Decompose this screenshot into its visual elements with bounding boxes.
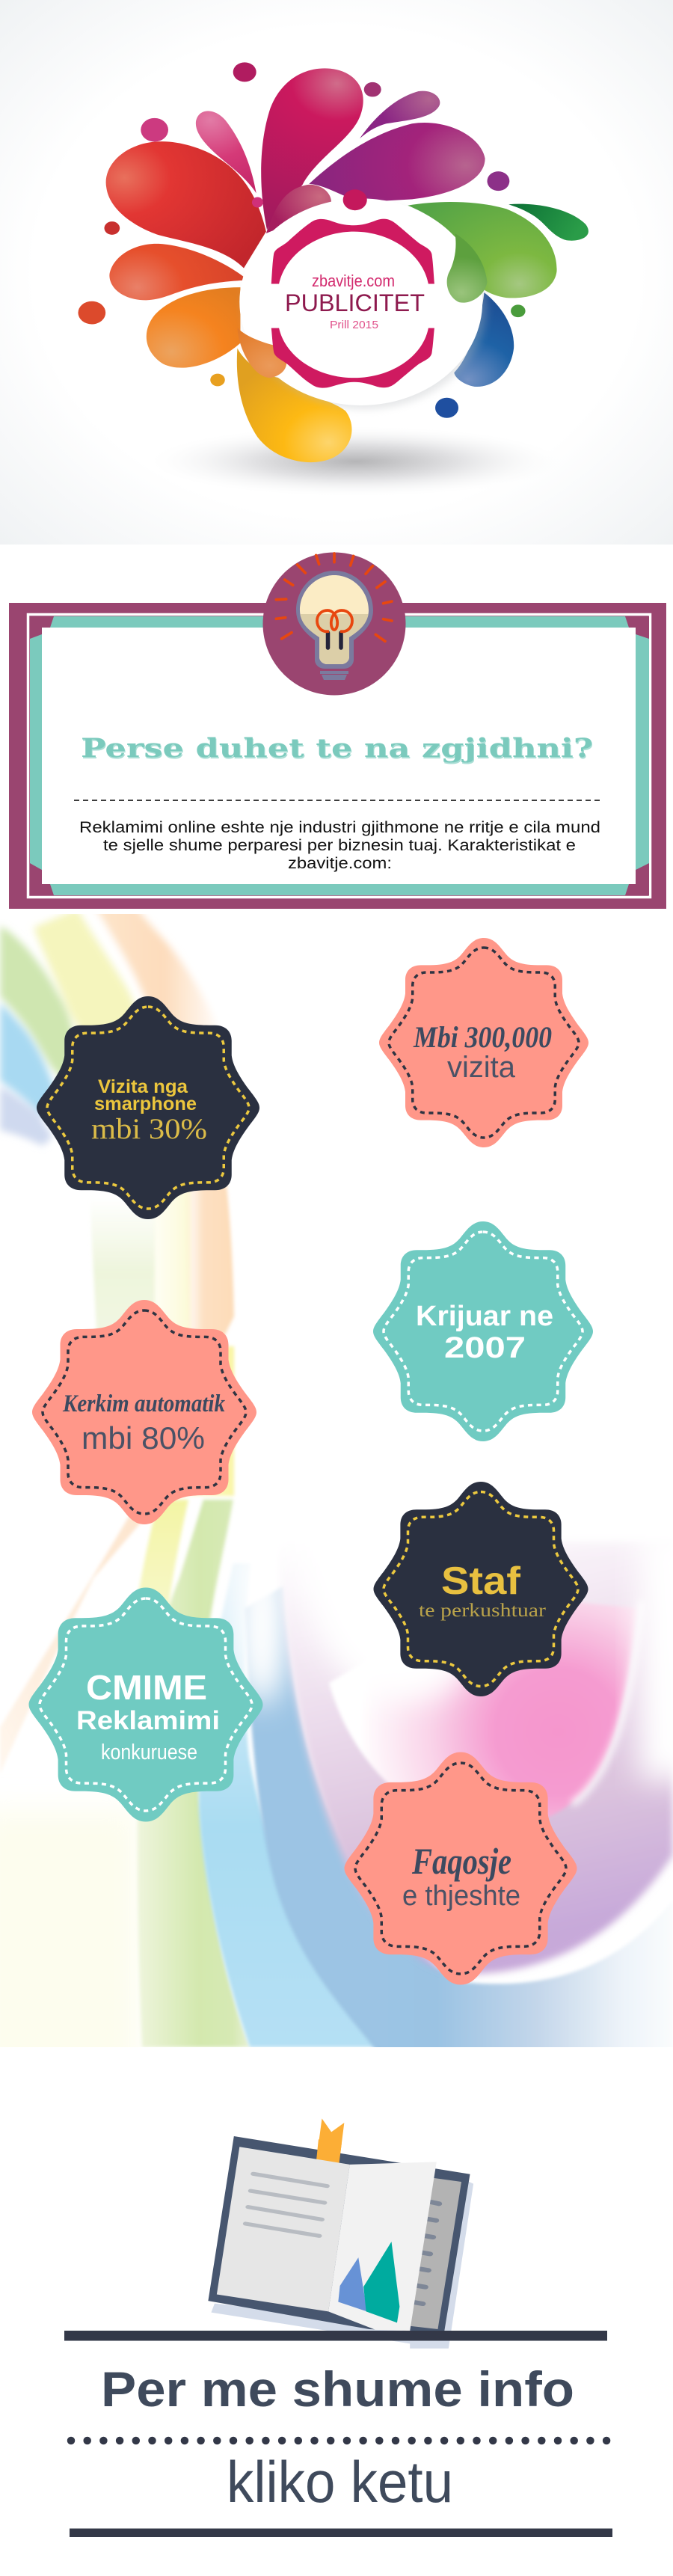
- white circle shadow: [243, 203, 486, 409]
- white veil top: [254, 1451, 673, 1533]
- badge: Krijuar ne 2007: [373, 1221, 593, 1441]
- badge: Mbi 300,000 vizita: [379, 938, 589, 1147]
- link text: kliko ketu: kliko ketu: [227, 2449, 453, 2515]
- heading: Perse duhet te na zgjidhni?: [81, 733, 593, 764]
- white circle: [239, 198, 482, 405]
- hero text: zbavitje.com: zbavitje.com: [312, 272, 395, 290]
- body text: te sjelle shume perparesi per biznesin tuaj. Karakteristikat e: [103, 836, 576, 854]
- purple frame: [9, 603, 666, 909]
- filament: [317, 610, 352, 631]
- petal: orange red: [109, 244, 244, 300]
- droplets: [78, 62, 526, 418]
- petal: magenta: [261, 68, 363, 230]
- badge: Staf te perkushtuar: te perkushtuar: [419, 1601, 547, 1621]
- bookmark front: [316, 2139, 342, 2164]
- petal: dark green: [508, 204, 589, 241]
- body text: zbavitje.com:: [288, 854, 392, 872]
- teal frame: [30, 616, 649, 895]
- middle bands: [90, 1167, 234, 1496]
- bottom bar: [70, 2528, 612, 2537]
- chart: blue: [338, 2257, 367, 2311]
- pink lobe: [329, 1602, 633, 1818]
- badge: Faqosje e thjeshte: e thjeshte: [402, 1880, 520, 1912]
- top left bands: [0, 898, 224, 1146]
- turning page: [328, 2162, 437, 2331]
- badge: Vizita nga smarphone: [37, 996, 259, 1219]
- badge: Staf te perkushtuar: Staf: [441, 1560, 521, 1603]
- page tabs: [415, 2202, 439, 2304]
- corner tabs: [30, 616, 649, 895]
- bookmark: [316, 2118, 344, 2164]
- body text: Reklamimi online eshte nje industri gjithmone ne rritje e cila mund: [79, 818, 600, 836]
- petal: yellow: [237, 349, 351, 462]
- chart: teal: [363, 2242, 399, 2322]
- light blue band: [199, 1563, 381, 2047]
- lower left bands: [0, 1500, 250, 2047]
- badge: Kerkim automatik mbi 80%: mbi 80%: [82, 1420, 205, 1456]
- petal: dark purple: [360, 91, 440, 138]
- badge: Faqosje e thjeshte: [344, 1752, 577, 1985]
- icon: light bulb: [263, 552, 405, 696]
- back cover: [208, 2136, 470, 2331]
- badge: Vizita nga smarphone: smarphone: [94, 1094, 197, 1114]
- badge: Staf te perkushtuar: [374, 1482, 588, 1696]
- badge: Vizita nga smarphone: mbi 30%: [91, 1113, 207, 1145]
- badge: Krijuar ne 2007: 2007: [444, 1331, 526, 1364]
- body text: [79, 818, 600, 872]
- white veil over blue top: [235, 1541, 289, 1705]
- lower left pale wash: [0, 1810, 138, 2047]
- petal: blue: [454, 292, 514, 387]
- panel: why choose us: [9, 552, 666, 909]
- badge: Kerkim automatik mbi 80%: [32, 1300, 256, 1524]
- bulb glass: [300, 575, 369, 664]
- white veil upper right: [639, 1526, 673, 1780]
- rays: [276, 553, 392, 641]
- ball: magenta: [266, 185, 331, 233]
- top bar: [64, 2331, 607, 2341]
- hero title: PUBLICITET: PUBLICITET: [285, 289, 425, 316]
- petal: pink: [196, 111, 256, 193]
- petal: red: [106, 141, 266, 269]
- white content card: [42, 628, 636, 884]
- purple band: [278, 1541, 673, 1974]
- petal: purple: [309, 123, 485, 202]
- heading: Perse duhet te na zgjidhni?: [82, 735, 594, 765]
- hero date: Prill 2015: [330, 319, 378, 331]
- right underlying page: [410, 2178, 461, 2329]
- darker blue band: [245, 1586, 673, 2057]
- badge: CMIME Reklamimi konkuruese: konkuruese: [101, 1741, 197, 1764]
- badge: CMIME Reklamimi konkuruese: CMIME: [86, 1668, 207, 1707]
- petal: orange: [147, 287, 240, 368]
- white upper lobe: [311, 1561, 468, 1710]
- white keyline: [28, 615, 651, 898]
- rainbow background: [0, 898, 673, 2079]
- badge: CMIME Reklamimi konkuruese: Reklamimi: [76, 1706, 220, 1735]
- dashed divider: [74, 800, 602, 801]
- white halo around pink: [572, 1601, 642, 1804]
- ball: orange connector: [237, 328, 286, 378]
- badge: Mbi 300,000 vizita: vizita: [447, 1051, 516, 1084]
- left page: [217, 2147, 350, 2311]
- petal: green: [408, 202, 557, 298]
- badge: Vizita nga smarphone: Vizita nga: [98, 1076, 188, 1097]
- crimson ring: [271, 219, 434, 388]
- petal: green inner drop: [447, 233, 487, 303]
- book shadow: [211, 2181, 473, 2349]
- heading: Per me shume info: Per me shume info: [101, 2361, 574, 2417]
- dotted divider: [71, 2437, 607, 2444]
- bulb lower shade: [300, 614, 369, 664]
- badge: Kerkim automatik mbi 80%: Kerkim automatik: [62, 1390, 225, 1417]
- hero panel: colourful splash logo: [0, 0, 673, 545]
- badge: Faqosje e thjeshte: Faqosje: [411, 1840, 511, 1882]
- ground shadow: [150, 426, 562, 496]
- filament legs: [328, 633, 341, 648]
- bulb outline: [296, 571, 373, 669]
- badge: CMIME Reklamimi konkuruese: [28, 1587, 262, 1822]
- splash artwork: [78, 62, 589, 496]
- badge: Krijuar ne 2007: Krijuar ne: [416, 1301, 553, 1332]
- icon: open book: [208, 2118, 473, 2349]
- bulb base: [320, 671, 348, 680]
- badge: Mbi 300,000 vizita: Mbi 300,000: [413, 1020, 552, 1054]
- text lines: [245, 2174, 327, 2236]
